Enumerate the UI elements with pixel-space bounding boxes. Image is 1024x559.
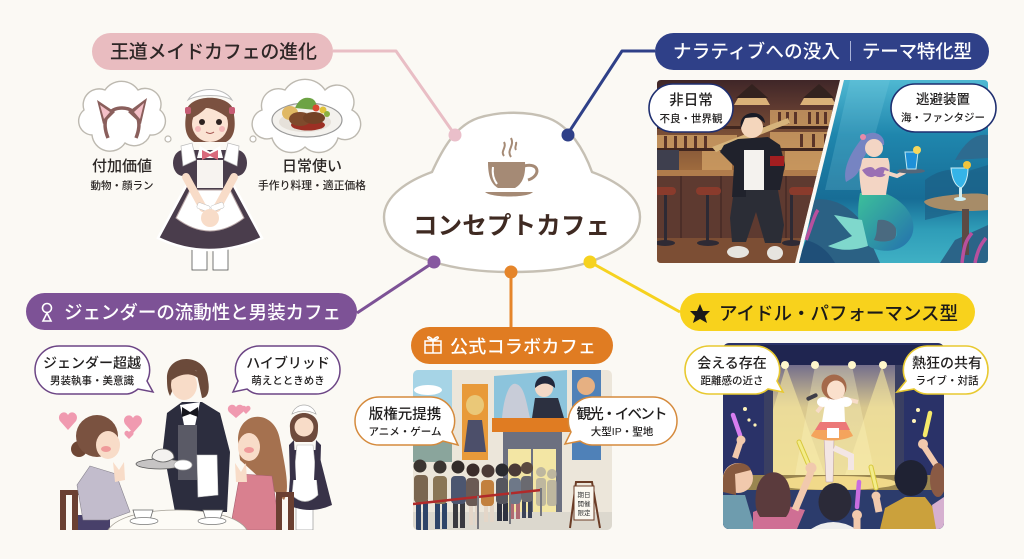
panel: official collab cafe [355,327,677,530]
connector dots [428,128,596,278]
panel: narrative immersion [649,33,996,263]
icon: gift [425,337,441,353]
central cloud: concept cafe [384,113,640,272]
callout: transcending gender: ジェンダー超越 [43,355,141,371]
callout: shared excitement: ライブ・対話 [916,374,979,387]
heading: narrative immersion and theme: ナラティブへの没入 [673,41,840,62]
icon: star [690,304,710,323]
callout: escape device: 海・ファンタジー [901,111,985,124]
callout: hybrid: 萌えとときめき [251,374,325,387]
callout: transcending gender: 男装執事・美意識 [50,374,134,387]
hearts [59,405,251,439]
callout: escape device [891,84,996,132]
guest left [60,415,130,530]
illustration: cafe storefront with queue: 限定 [578,508,591,517]
glow sticks [733,413,930,507]
callout: hybrid [233,346,340,394]
heading: maid cafe evolution: 王道メイドカフェの進化 [110,41,317,63]
callout: shared excitement: 熱狂の共有 [912,355,982,371]
heading: gender fluidity and butler cafe: ジェンダーの流動性と男装カフェ [64,302,341,323]
sparkles [743,407,920,427]
heading: official collab cafe: 公式コラボカフェ [450,337,596,357]
queue of fans [414,460,533,530]
illustration: underwater mermaid scene [795,80,990,263]
heading: idol performance [680,293,975,331]
label: everyday use [258,158,366,192]
callout: shared excitement [897,346,988,394]
illustration: cafe storefront with queue [413,370,612,530]
heading: idol performance: アイドル・パフォーマンス型 [719,303,958,324]
label: added value: 付加価値 [92,158,152,175]
audience [723,436,946,529]
callout: rights holder partnership [355,397,458,445]
illustration: butler serving two guests [59,359,332,530]
label: everyday use: 日常使い [282,158,342,175]
heading: narrative immersion and theme: テーマ特化型 [862,41,972,62]
callout: extraordinary [649,84,733,132]
callout: escape device: 逃避装置 [916,92,970,107]
label: everyday use: 手作り料理・適正価格 [258,178,366,192]
label: added value [90,158,154,192]
callout: tourism and events: 観光・イベント [576,406,668,423]
heading: narrative immersion and theme [655,33,989,70]
callout: idols you can meet [685,346,783,394]
callout: extraordinary: 非日常 [669,92,713,109]
callout: transcending gender [35,346,153,394]
callout: rights holder partnership: 版権元提携 [369,406,441,423]
illustration: delinquent bar scene [654,80,847,263]
thought bubble: cat ears [79,81,171,151]
heading: official collab cafe [411,327,613,364]
panel: idol performance [680,293,988,529]
callout: tourism and events: 大型IP・聖地 [591,425,654,438]
icon: coffee cup [485,138,537,196]
callout: tourism and events [565,397,677,445]
callout: idols you can meet: 距離感の近さ [700,374,764,387]
heading: maid cafe evolution [92,33,333,70]
label: added value: 動物・顔ラン [90,179,154,192]
panel: gender fluidity [26,293,357,530]
illustration: idol on stage with audience [723,343,946,529]
callout: rights holder partnership: アニメ・ゲーム [369,425,441,438]
connector lines [333,51,680,328]
illustration: cafe storefront with queue: 開催 [578,499,591,508]
callout: hybrid: ハイブリッド [246,355,330,371]
idol [806,374,858,482]
callout: extraordinary: 不良・世界観 [660,112,723,125]
illustration: cafe storefront with queue: 期日 [578,491,590,499]
small maid [288,405,332,530]
panel: classic maid cafe [79,33,366,270]
thought bubble: plate of food [250,79,361,152]
table with cups [108,510,247,530]
cloud title: コンセプトカフェ [413,212,610,240]
butler [136,359,230,512]
illustration: maid [158,90,262,270]
callout: idols you can meet: 会える存在 [697,355,767,371]
guest right [230,417,294,530]
heading: gender fluidity and butler cafe [26,293,357,330]
icon: gender symbol [42,304,52,321]
